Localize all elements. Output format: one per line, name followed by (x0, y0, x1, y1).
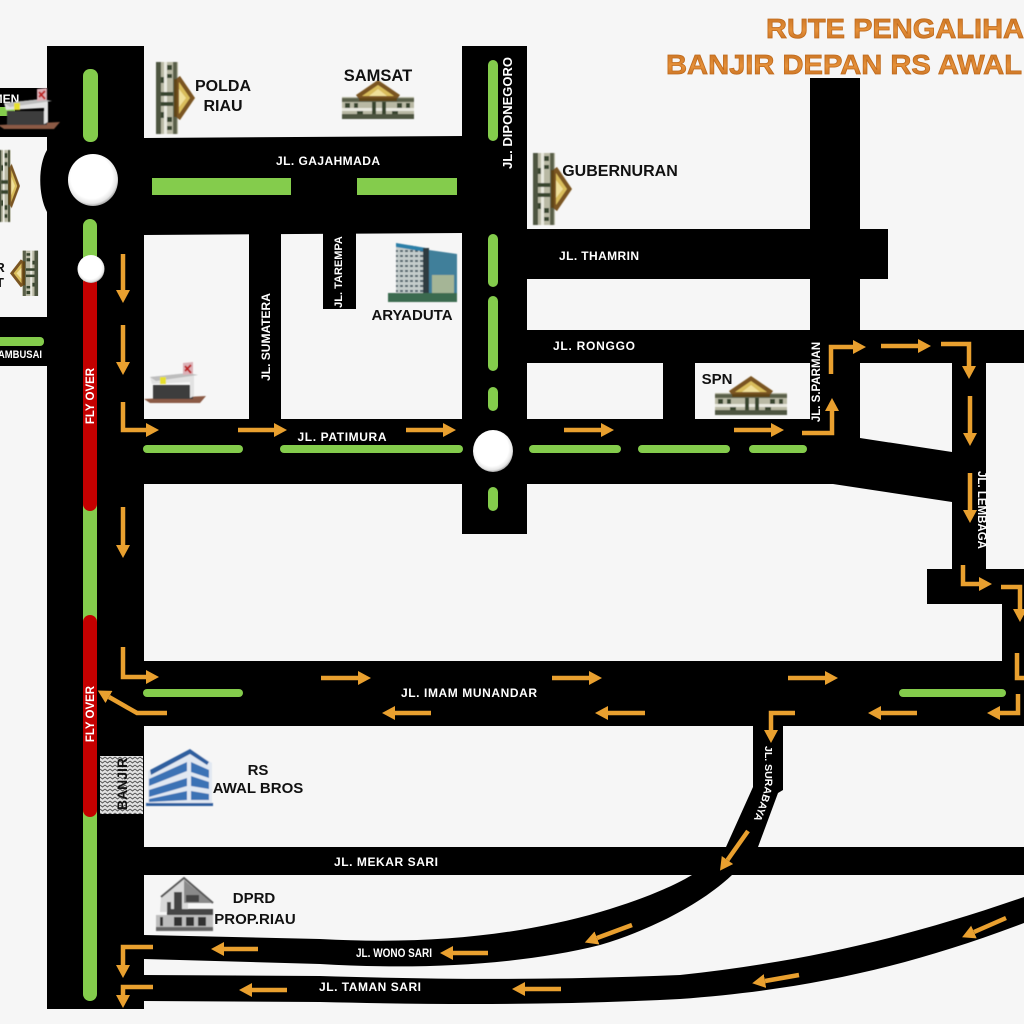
landmark: SPN: SPN (702, 371, 732, 388)
Jl. Lembaga road (927, 363, 1024, 661)
main road medians (83, 69, 98, 1001)
landmark: Samsat: SAMSAT (344, 67, 412, 85)
Jl. Gajahmada road (144, 136, 463, 235)
icon: shop top left (0, 88, 60, 129)
road name labels: FLY OVER (85, 685, 97, 742)
Jl. S.Parman road (810, 78, 860, 448)
icon: Gubernuran building (533, 153, 572, 225)
road name labels: JL. PATIMURA (298, 430, 387, 444)
roundabout: flyover start (78, 255, 104, 283)
icon: Polda building (156, 62, 195, 134)
road name labels: JL. S.PARMAN (811, 342, 823, 422)
road name labels: JL. LEMBAGA (975, 471, 987, 549)
arrows along Taman Sari (123, 918, 1006, 995)
landmark: SPN (702, 371, 787, 415)
road name labels: JL. TAMAN SARI (319, 980, 421, 994)
icon: DPRD house (156, 878, 213, 931)
landmark: Gubernuran (533, 153, 678, 225)
Jl. Patimura road (144, 419, 986, 503)
Imam Munandar medians (143, 689, 1006, 697)
road name labels: JL. SURABAYA (754, 746, 772, 820)
Jl. Wono Sari road (144, 875, 732, 966)
arrows down main road (109, 254, 167, 713)
road name labels: JL. DIPONEGORO (500, 57, 515, 169)
icon: SPN building (715, 376, 787, 415)
Patimura medians (143, 445, 807, 453)
road name labels: JL. WONO SARI (356, 946, 432, 960)
Jl. Surabaya road (726, 726, 783, 847)
icon: hospital building (146, 749, 213, 806)
arrows along Wono Sari (123, 925, 632, 965)
landmark: DPRD Prop. Riau: DPRD (233, 890, 275, 907)
Jl. Tarempa road (323, 233, 356, 309)
road name labels: JL. GAJAHMADA (276, 154, 380, 168)
Jl. Diponegoro road (462, 46, 527, 534)
arrows along Imam Munandar (321, 678, 917, 713)
arrows down Lembaga (963, 396, 1024, 713)
title: RUTE PENGALIHA (766, 13, 1024, 44)
landmark: Aryaduta (371, 243, 457, 324)
landmark: RS Awal Bros (146, 749, 303, 806)
Gajahmada medians (152, 178, 457, 195)
side road medians (0, 107, 44, 346)
landmark: DPRD Prop. Riau (156, 878, 296, 931)
icon: small building left (0, 251, 38, 296)
landmark: DPRD Prop. Riau: PROP.RIAU (214, 911, 296, 928)
road name labels: FLY OVER (85, 367, 97, 424)
left side roads (0, 88, 47, 366)
landmark: Aryaduta: ARYADUTA (371, 307, 453, 324)
title (666, 13, 1024, 80)
Jl. Imam Munandar road (144, 661, 1024, 726)
Jl. Thamrin road (527, 229, 888, 279)
title: BANJIR DEPAN RS AWAL (666, 49, 1022, 80)
landmark: Samsat (342, 67, 414, 119)
road name labels: JL. MEKAR SARI (334, 855, 438, 869)
flood zone: Banjir (100, 756, 143, 814)
main road: Jl. Sudirman (47, 46, 144, 1009)
road name labels: JL. RONGGO (553, 339, 635, 353)
arrows along Patimura (238, 428, 771, 432)
landmark: Polda Riau: RIAU (203, 98, 243, 115)
road name labels: JL. TAREMPA (333, 236, 345, 308)
flood zone: Banjir: BANJIR (114, 758, 130, 810)
road name labels: JL. SUMATERA (259, 293, 273, 381)
road name labels: JL. IMAM MUNANDAR (401, 686, 537, 700)
icon: shop on Patimura (144, 362, 206, 403)
Jl. Mekar Sari road (144, 847, 1024, 875)
roundabout: north (68, 154, 118, 206)
icon: building left edge (0, 150, 20, 222)
Jl. Sumatera road (249, 233, 281, 420)
icon: Samsat building (342, 80, 414, 119)
Jl. Ronggo road (527, 330, 1024, 420)
landmark: Polda Riau (156, 62, 251, 134)
arrows up S.Parman and along Ronggo (802, 344, 969, 433)
landmark: RS Awal Bros: AWAL BROS (213, 780, 303, 797)
diversion route arrows (109, 254, 1024, 995)
icon: Aryaduta hotel (388, 243, 457, 302)
arrows down Surabaya (728, 713, 795, 860)
roundabout: Patimura (473, 430, 513, 472)
landmark: Polda Riau: POLDA (195, 78, 251, 95)
Diponegoro medians (488, 60, 498, 511)
landmark: Gubernuran: GUBERNURAN (562, 163, 678, 180)
road name labels: JL. THAMRIN (559, 249, 639, 263)
landmark: RS Awal Bros: RS (248, 762, 268, 779)
Jl. Taman Sari road (144, 897, 1024, 1004)
